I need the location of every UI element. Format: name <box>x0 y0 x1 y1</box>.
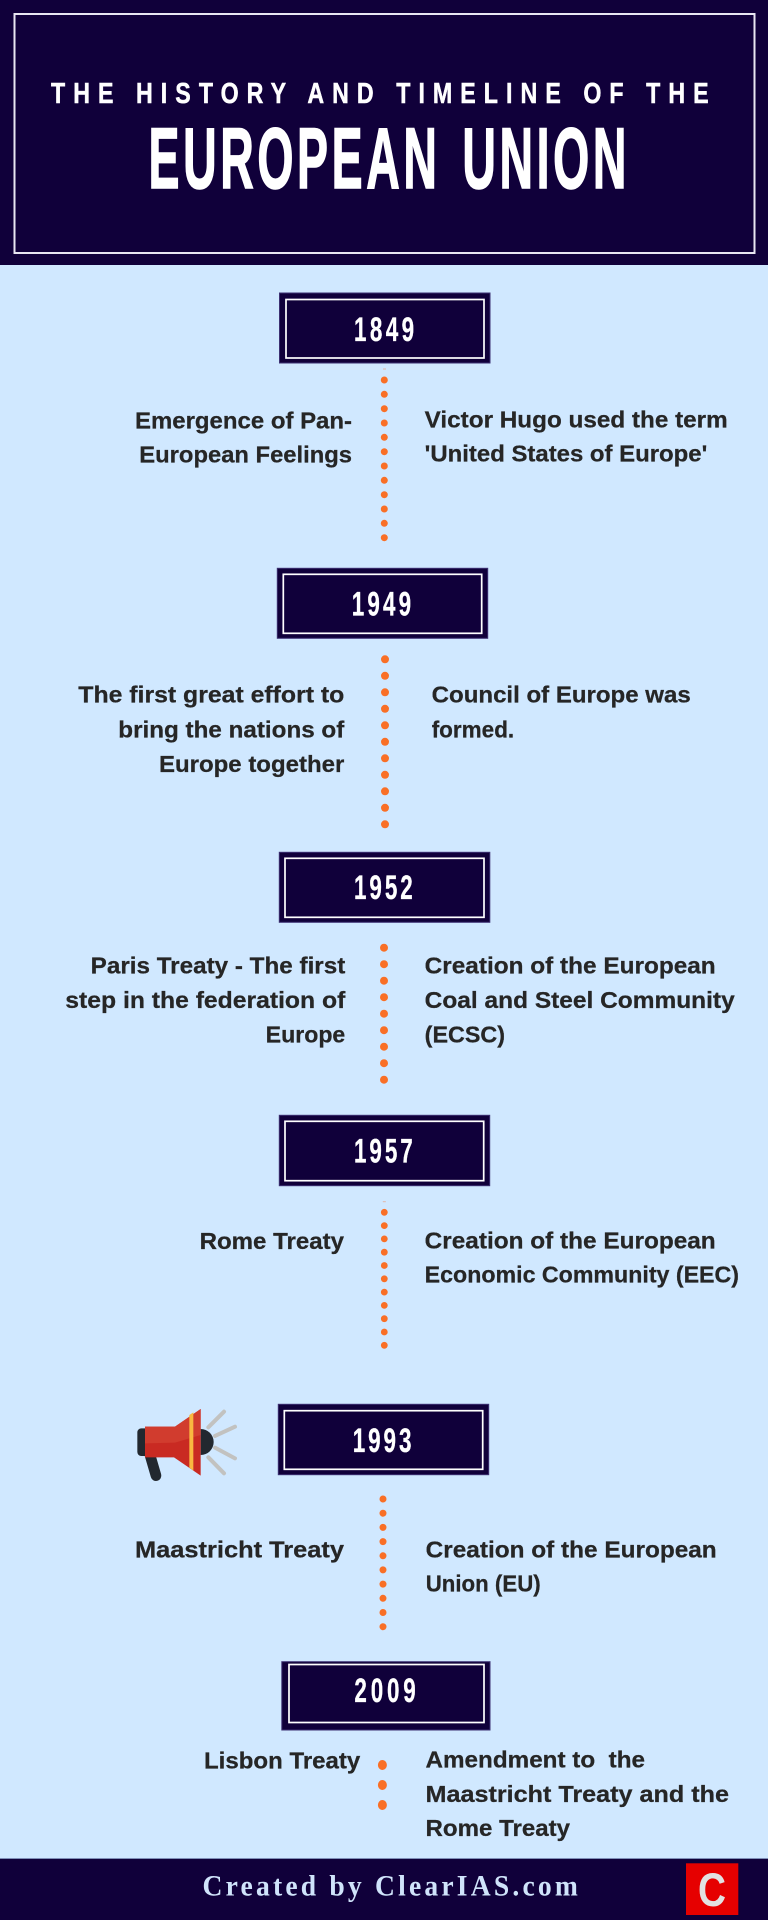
text block: 1849 detail: 'United States of Europe' <box>425 441 707 467</box>
dotted connector: 2009 <box>378 1760 387 1810</box>
icon: ClearIAS logo <box>686 1863 738 1916</box>
text block: 1952 event <box>65 952 346 1048</box>
dotted connector: 1957 <box>381 1201 388 1349</box>
timeline entry: 1993 <box>135 1404 717 1630</box>
text block: 1849 event <box>135 407 352 468</box>
year badge: 2009: 2009 <box>354 1672 416 1710</box>
year badge: 1949 <box>277 568 488 638</box>
text block: 1949 event: The first great effort to <box>78 682 344 708</box>
text block: 2009 detail: Maastricht Treaty and the <box>426 1781 729 1807</box>
text block: 1952 event: step in the federation of <box>65 987 346 1013</box>
icon: ClearIAS logo: C <box>698 1863 726 1916</box>
text block: 1952 detail: Creation of the European <box>425 952 716 978</box>
panel: title header <box>0 0 768 265</box>
text block: 1993 event: Maastricht Treaty <box>135 1537 344 1563</box>
year badge: 1952: 1952 <box>354 869 413 907</box>
text block: 1952 detail: Coal and Steel Community <box>425 987 735 1013</box>
icon: megaphone <box>137 1409 235 1476</box>
text block: 1849 event: European Feelings <box>139 442 352 468</box>
text block: 1993 detail <box>426 1536 717 1597</box>
heading: main title: EUROPEAN UNION <box>148 110 626 207</box>
year badge: 1849: 1849 <box>354 311 414 349</box>
text block: 1949 detail: formed. <box>432 716 514 742</box>
text block: 1849 event: Emergence of Pan- <box>135 407 352 433</box>
text block: 1957 detail: Creation of the European <box>425 1227 716 1253</box>
timeline entry: 2009 <box>204 1662 729 1841</box>
text block: 1949 event <box>78 682 345 777</box>
text block: 2009 detail: Rome Treaty <box>426 1815 570 1841</box>
text block: 2009 detail: Amendment to the <box>426 1746 645 1772</box>
year badge: 1849 <box>280 293 490 363</box>
text block: 1957 event: Rome Treaty <box>200 1228 344 1254</box>
text block: 1952 detail <box>425 952 735 1047</box>
text block: 1949 detail <box>432 682 691 742</box>
footer credit text: Created by ClearIAS.com <box>202 1870 578 1903</box>
text block: 1957 detail <box>425 1227 739 1288</box>
year badge: 1949: 1949 <box>352 586 411 624</box>
text block: 1957 detail: Economic Community (EEC) <box>425 1262 739 1288</box>
timeline entry: 1949 <box>78 568 691 828</box>
timeline entry: 1952 <box>65 852 735 1084</box>
text block: 1849 detail: Victor Hugo used the term <box>425 406 728 432</box>
text block: 1952 event: Europe <box>266 1022 345 1048</box>
year badge: 1952 <box>279 852 490 922</box>
dotted connector: 1952 <box>380 944 388 1084</box>
timeline entry: 1957 <box>200 1115 739 1349</box>
year badge: 1993 <box>278 1404 489 1475</box>
year badge: 2009 <box>282 1662 490 1730</box>
year badge: 1993: 1993 <box>353 1422 411 1460</box>
dotted connector: 1949 <box>381 655 389 828</box>
text block: 1952 detail: (ECSC) <box>425 1021 505 1047</box>
timeline entry: 1849 <box>135 293 728 541</box>
text block: 1993 detail: Creation of the European <box>426 1536 717 1562</box>
dotted connector: 1849 <box>381 368 388 541</box>
text block: 1949 detail: Council of Europe was <box>432 682 691 708</box>
text block: 1952 event: Paris Treaty - The first <box>91 952 346 978</box>
text block: 1949 event: Europe together <box>159 751 344 777</box>
text block: 2009 event: Lisbon Treaty <box>204 1747 361 1773</box>
text block: 2009 detail <box>426 1746 729 1841</box>
text block: 1949 event: bring the nations of <box>118 716 345 742</box>
heading: subtitle: THE HISTORY AND TIMELINE OF THE <box>51 76 709 110</box>
year badge: 1957 <box>279 1115 490 1186</box>
panel: footer <box>0 1858 768 1920</box>
text block: 1993 detail: Union (EU) <box>426 1571 541 1597</box>
text block: 1849 detail <box>425 406 728 467</box>
dotted connector: 1993 <box>380 1496 386 1630</box>
year badge: 1957: 1957 <box>354 1133 413 1171</box>
